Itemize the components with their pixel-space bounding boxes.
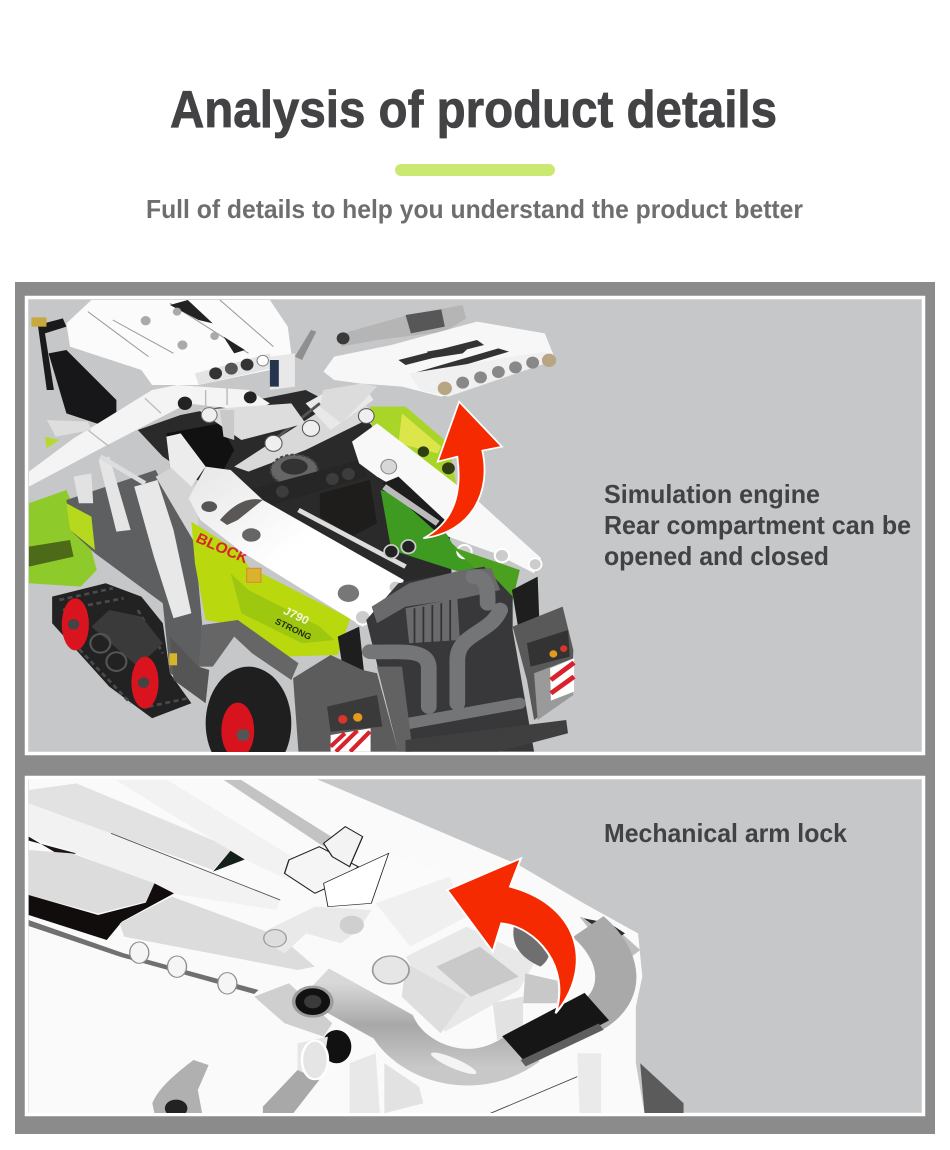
panel: simulation engine	[26, 298, 924, 780]
gear	[271, 455, 318, 485]
lower white studs	[130, 942, 237, 994]
dampers	[338, 626, 364, 670]
front wheel	[206, 666, 292, 752]
cab tower	[49, 350, 116, 430]
right rear corner	[513, 607, 573, 720]
small pin and clip	[267, 907, 371, 953]
illustration: green harvester model with opened rear compartment: BLOCK	[193, 530, 251, 567]
panel text: simulation engine: Rear compartment can be	[604, 510, 911, 540]
illustration: close-up of arm lock	[29, 778, 684, 1117]
green right side under cover	[452, 547, 520, 600]
left rear corner	[293, 655, 398, 752]
top rods	[216, 842, 248, 860]
left green parts	[29, 490, 97, 587]
green accent bar	[395, 164, 555, 176]
panel: mechanical arm lock	[26, 778, 924, 1117]
subtitle: Full of details to help you understand the product better	[146, 194, 803, 224]
green body panel	[191, 522, 350, 657]
dark beams	[279, 471, 319, 486]
illustration: green harvester model with opened rear compartment: J790	[281, 605, 312, 628]
radiator	[406, 598, 460, 643]
open socket	[402, 927, 536, 1033]
silver curved pipe	[315, 927, 616, 1067]
hanging white linkages	[99, 457, 131, 532]
panel text: simulation engine: Simulation engine	[604, 479, 820, 509]
rear engine block	[366, 567, 534, 752]
outer gray frame	[15, 282, 935, 1134]
exhaust pipes	[370, 577, 520, 723]
red arrow: lock direction	[447, 858, 577, 1013]
cab roof	[66, 300, 291, 385]
white left cover	[189, 467, 404, 627]
panel text: mechanical arm lock: Mechanical arm lock	[604, 818, 848, 848]
gray side body	[66, 470, 202, 690]
pipe end with bearing	[294, 987, 332, 1016]
inner posts	[493, 997, 523, 1040]
lower cylinder and socket	[254, 983, 332, 1037]
long white arm	[29, 385, 270, 487]
white body silhouette	[29, 778, 645, 1113]
panel text: simulation engine	[604, 479, 911, 571]
lifted rear compartment cover	[320, 305, 556, 423]
red arrow: rear cover lift	[423, 402, 502, 538]
panel text: simulation engine: opened and closed	[604, 541, 829, 571]
central links and supports	[234, 405, 368, 472]
tracks	[52, 583, 191, 718]
illustration: green harvester model with opened rear compartment	[29, 300, 574, 780]
front fender	[199, 620, 298, 680]
white lock block	[324, 853, 467, 947]
upper slats	[29, 803, 280, 910]
dark engine bay	[138, 390, 452, 590]
white right cover	[352, 423, 541, 573]
illustration: green harvester model with opened rear compartment: STRONG	[273, 616, 313, 642]
title: Analysis of product details	[170, 81, 777, 139]
small hole bottom	[152, 1060, 209, 1113]
